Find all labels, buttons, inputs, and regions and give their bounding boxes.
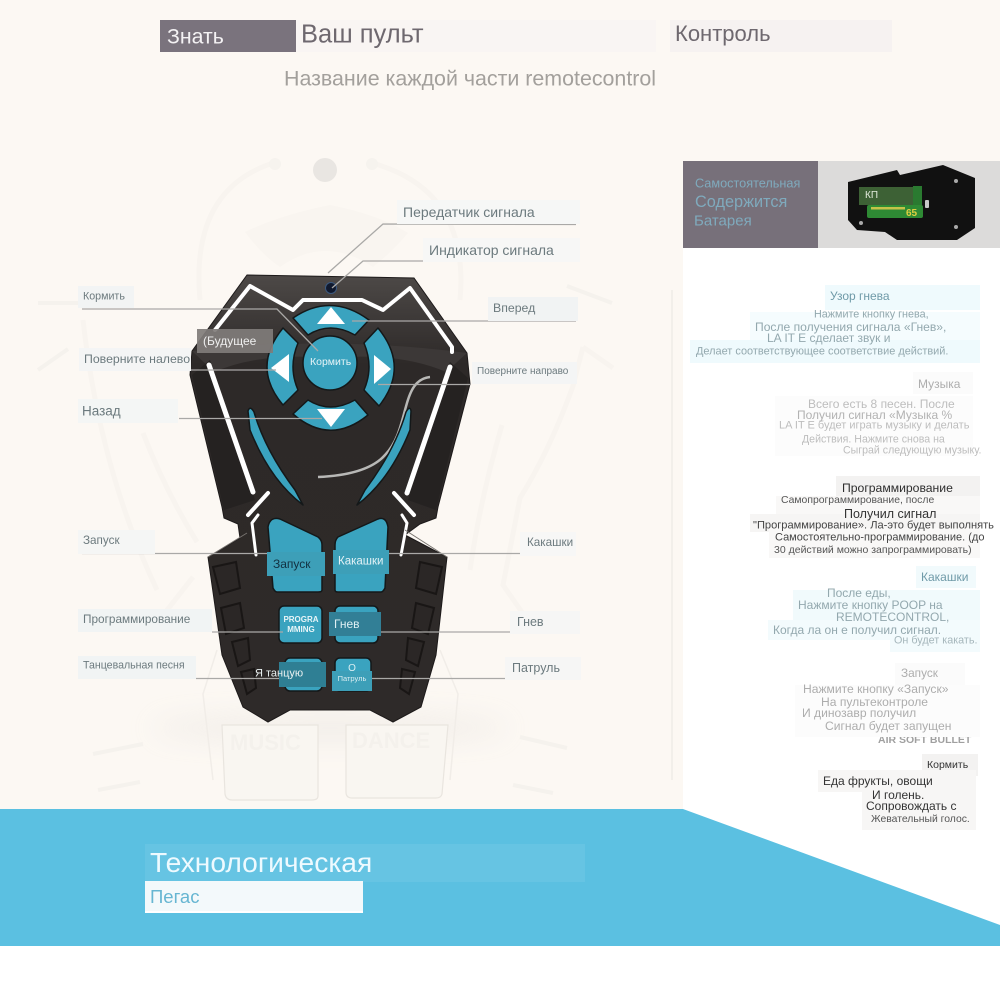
label: Назад: Назад — [82, 403, 121, 418]
panel: programming: "Программирование». Ла-это будет выполнять — [753, 519, 994, 531]
header band: Ваш пульт: Ваш пульт — [301, 20, 424, 48]
label: Кормить: Кормить — [83, 291, 125, 303]
heading: Запуск — [901, 666, 938, 680]
panel: poop: Когда ла он е получил сигнал. — [773, 623, 941, 637]
label: Назад — [78, 399, 178, 423]
label: Запуск: Запуск — [83, 534, 120, 547]
label: Программирование: Программирование — [83, 612, 190, 626]
footer subtitle — [145, 881, 363, 911]
overlay: Запуск button: Запуск — [273, 557, 311, 571]
panel: poop: Он будет какать. — [894, 635, 978, 647]
label: Поверните налево — [79, 348, 191, 371]
overlay: Патруль text — [338, 663, 366, 683]
heading: Узор гнева — [830, 289, 890, 303]
faint background robot pattern: MUSIC — [230, 730, 301, 755]
heading: Какашки — [921, 570, 968, 584]
long slots — [248, 408, 303, 505]
panel: poop: REMOTECONTROL, — [836, 610, 949, 624]
blue footer band — [0, 809, 1000, 946]
label: Передатчик сигнала — [397, 200, 580, 224]
battery compartment photo: 65 — [906, 208, 918, 219]
heading: Программирование — [842, 481, 953, 495]
panel: launch: На пультеконтроле — [821, 695, 928, 709]
button: poop — [335, 518, 388, 592]
description: Самопрограммирование, после — [781, 495, 934, 506]
panel: music: Получил сигнал «Музыка % — [797, 408, 952, 422]
faint background robot pattern: DANCE — [352, 728, 430, 753]
overlay: Кормить center: Кормить — [310, 356, 351, 368]
panel: music: LA IT E будет играть музыку и делать — [779, 420, 969, 432]
overlay: Какашки button: Какашки — [338, 555, 383, 567]
white trim lines — [209, 286, 452, 555]
label: Кормить — [78, 286, 134, 308]
button: center — [303, 336, 357, 390]
button: dance — [285, 658, 322, 691]
overlay: Гнев button — [329, 612, 381, 636]
panel: feed: И голень. — [872, 788, 924, 802]
signal LED — [326, 282, 336, 294]
button: patrol — [335, 658, 371, 691]
label: Вперед — [488, 297, 578, 321]
footer title — [145, 844, 585, 882]
footer title: Технологическая — [150, 846, 372, 878]
label: Поверните направо — [472, 362, 577, 384]
КП tag — [859, 187, 913, 205]
cream background panel — [0, 0, 1000, 161]
overlay: PROGRAMMING button — [283, 615, 319, 634]
label: Индикатор сигнала: Индикатор сигнала — [429, 242, 554, 258]
description: После еды, — [827, 586, 891, 600]
label: Патруль: Патруль — [512, 661, 560, 675]
label: Программирование — [78, 609, 212, 632]
highlight swoosh — [318, 377, 430, 477]
description: Всего есть 8 песен. После — [808, 397, 955, 411]
button: programming — [279, 606, 322, 643]
panel: battery — [683, 161, 1000, 248]
header word: Контроль — [670, 20, 892, 52]
header title — [160, 20, 771, 52]
panel: anger pattern: Делает соответствующее соответствие действий. — [696, 346, 948, 358]
button: launch — [268, 518, 322, 592]
КП tag: КП — [865, 190, 878, 201]
overlay: Запуск button — [267, 552, 325, 576]
panel: programming — [750, 476, 994, 556]
label: Запуск — [78, 530, 155, 554]
battery text block — [683, 161, 818, 248]
overlay: Гнев button: Гнев — [334, 617, 360, 631]
panel: music: Действия. Нажмите снова на — [802, 434, 945, 446]
faint background robot pattern — [202, 158, 673, 800]
footer subtitle: Пегас — [150, 886, 199, 907]
panel: feed — [818, 754, 978, 830]
panel: programming: Самостоятельно-программирование. (до — [775, 532, 984, 544]
heading: Кормить — [927, 759, 968, 771]
overlay: Какашки button — [333, 550, 389, 574]
label: Танцевальная песня: Танцевальная песня — [83, 660, 185, 672]
overlay: Я танцую text: Я танцую — [255, 668, 303, 680]
label: Передатчик сигнала: Передатчик сигнала — [403, 204, 535, 220]
description: Нажмите кнопку гнева, — [814, 309, 929, 321]
header word: Знать: Знать — [167, 24, 224, 48]
label: Гнев — [510, 611, 580, 634]
overlay: PROGRAMMING button: MMING — [287, 625, 315, 634]
panel: poop — [768, 566, 980, 652]
battery text block: Батарея — [694, 212, 752, 230]
header band: Ваш пульт — [296, 20, 656, 52]
panel: launch — [802, 666, 972, 744]
label: Какашки — [520, 532, 576, 556]
label: Поверните налево: Поверните налево — [84, 352, 190, 366]
label: Индикатор сигнала — [423, 238, 580, 262]
overlay: Будущее: (Будущее — [203, 334, 256, 348]
label: Поверните направо: Поверните направо — [477, 366, 568, 377]
overlay: Я танцую button — [279, 662, 326, 687]
arrow triangles — [271, 307, 391, 427]
overlay: Будущее — [197, 329, 273, 353]
panel: anger pattern: После получения сигнала «Гнев», — [755, 320, 946, 334]
overlay: Патруль text: O — [348, 663, 356, 674]
panel: anger pattern — [690, 285, 980, 363]
label: Танцевальная песня — [78, 656, 196, 679]
leader lines — [82, 224, 576, 678]
header word: Контроль: Контроль — [675, 21, 771, 46]
header word: Знать — [160, 20, 296, 52]
battery text block: Содержится — [695, 193, 787, 211]
subtitle: Название каждой части remotecontrol — [284, 66, 656, 90]
panel: anger pattern: LA IT E сделает звук и — [767, 331, 890, 345]
side grip ribs — [213, 562, 442, 694]
panel: poop: Нажмите кнопку POOP на — [798, 598, 943, 612]
button: up — [293, 305, 369, 335]
panel: launch: Сигнал будет запущен — [825, 719, 951, 733]
battery text block: Самостоятельная — [695, 177, 800, 191]
remote control illustration — [82, 223, 576, 723]
description: Еда фрукты, овощи — [823, 774, 933, 788]
label: Патруль — [505, 657, 581, 680]
battery compartment photo — [848, 165, 975, 240]
label: Какашки: Какашки — [527, 536, 573, 549]
D-pad buttons — [248, 305, 411, 691]
button: down — [293, 400, 368, 430]
button: left — [267, 328, 298, 405]
panel: launch: И динозавр получил — [802, 706, 916, 720]
panel: music — [779, 377, 981, 457]
overlay: Патруль button — [332, 671, 372, 691]
heading: Музыка — [918, 377, 960, 391]
panel: music: Сыграй следующую музыку. — [843, 445, 981, 457]
button: anger — [335, 606, 378, 643]
panel: programming: Получил сигнал — [844, 507, 936, 521]
panel: feed: Жевательный голос. — [871, 814, 970, 825]
overlay: Патруль text: Патруль — [338, 674, 366, 683]
remote body — [190, 275, 470, 722]
description: Нажмите кнопку «Запуск» — [803, 682, 948, 696]
panel: feed: Сопровождать с — [866, 799, 956, 813]
panel: programming: 30 действий можно запрограммировать) — [774, 544, 972, 556]
label: Вперед: Вперед — [493, 301, 535, 315]
button: right — [364, 328, 394, 406]
overlay: PROGRAMMING button: PROGRA — [283, 615, 319, 624]
label: Гнев: Гнев — [517, 615, 544, 629]
side darker panels — [192, 360, 468, 510]
